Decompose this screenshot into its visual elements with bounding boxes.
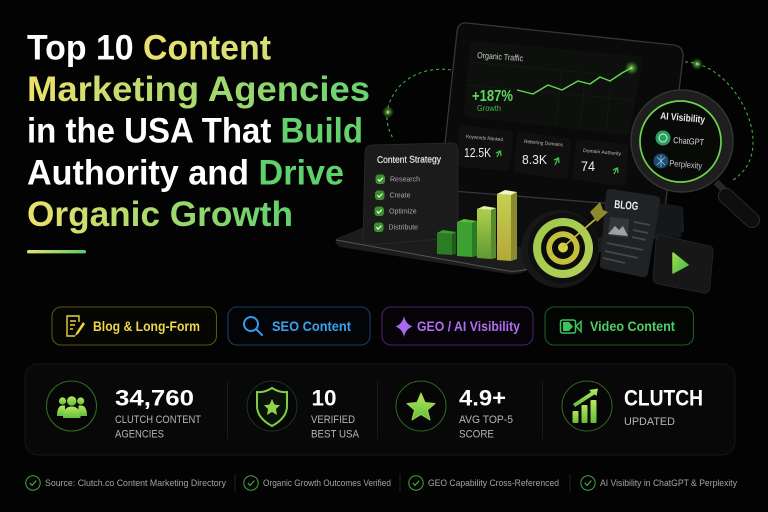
- checklist: Research: [390, 176, 420, 184]
- stat: verified: 10: [312, 386, 336, 411]
- icon: video camera: [560, 320, 581, 333]
- chip: seo content: [228, 307, 370, 345]
- chart gridlines: [466, 62, 636, 130]
- traffic endpoint glow: [624, 61, 638, 75]
- organic traffic panel: [464, 41, 642, 135]
- note: geo capability: [409, 476, 559, 490]
- magnifier handle: [716, 182, 726, 192]
- footer: verification notes: [26, 474, 737, 492]
- icon: people: [57, 396, 87, 418]
- checklist: [374, 174, 420, 232]
- checklist: Optimize: [389, 208, 417, 216]
- panel: content strategy: [363, 143, 458, 245]
- chip: geo and ai visibility: [382, 307, 533, 345]
- blog text lines: [603, 222, 650, 263]
- title underline: [27, 250, 86, 253]
- note: organic growth: [244, 476, 391, 490]
- blog label: BLOG: [614, 199, 639, 213]
- keyboard area: [440, 191, 640, 250]
- title: Marketing Agencies: [27, 70, 370, 109]
- stat: score: 4.9+: [459, 386, 506, 411]
- icon: video play tile: [653, 235, 713, 293]
- card: referring domains: [514, 132, 571, 179]
- laptop screen: [440, 23, 683, 208]
- stat: score: SCORE: [459, 428, 494, 440]
- stat: clutch updated: UPDATED: [624, 416, 675, 428]
- title: Authority and Drive: [27, 153, 344, 192]
- illustration: laptop: [336, 23, 684, 274]
- icon: shield star: [257, 388, 287, 426]
- title: [27, 28, 370, 234]
- title: Organic Growth: [27, 195, 293, 234]
- icon: target with dart: [521, 202, 608, 288]
- stat: clutch updated: CLUTCH: [624, 386, 703, 411]
- chip: video content: [545, 307, 694, 345]
- illustration: blog card: [600, 189, 660, 277]
- panel: statistics: [25, 364, 735, 455]
- traffic line: [517, 68, 631, 94]
- checklist: Create: [390, 192, 411, 200]
- chatgpt row: ChatGPT: [673, 135, 705, 147]
- stat: score: [396, 381, 513, 440]
- bar chart: 3D growth bars: [437, 190, 517, 261]
- chip: geo and ai visibility: GEO / AI Visibility: [417, 319, 520, 334]
- note: geo capability: GEO Capability Cross-Referenced: [428, 478, 559, 489]
- card: domain authority: 74: [581, 159, 595, 174]
- stat: verified: [247, 381, 360, 440]
- note: source: Source: Clutch.co Content Marketing Directory: [45, 478, 226, 489]
- stat: agencies: CLUTCH CONTENT: [115, 414, 201, 426]
- note: source: [26, 476, 226, 490]
- perplexity row: Perplexity: [669, 158, 703, 171]
- card: keywords ranked: Keywords Ranked: [466, 134, 503, 143]
- card: referring domains: Referring Domains: [524, 139, 564, 148]
- note: organic growth: Organic Growth Outcomes Verified: [263, 478, 391, 489]
- stat: verified: VERIFIED: [311, 414, 355, 426]
- category chips: [52, 307, 694, 345]
- lens heading: AI Visibility: [660, 111, 706, 126]
- icon: rising bars: [572, 388, 598, 423]
- title: in the USA That Build: [27, 112, 363, 151]
- card: domain authority: Domain Authority: [583, 148, 622, 157]
- note: ai visibility: AI Visibility in ChatGPT & Perplexity: [600, 478, 737, 489]
- title: Top 10 Content: [27, 28, 271, 67]
- icon: document pencil: [67, 316, 85, 336]
- magnifier lens: [631, 90, 733, 192]
- icon: star: [407, 393, 435, 420]
- icon: magnifying glass with AI visibility: [631, 90, 752, 220]
- laptop base: [336, 190, 684, 274]
- arrow: dashed orbit left: [382, 69, 451, 140]
- card: keywords ranked: [458, 125, 513, 171]
- laptop front rim: [336, 240, 530, 271]
- icon: sparkle: [396, 316, 412, 337]
- blog image: [608, 217, 629, 238]
- stat: clutch updated: [562, 381, 703, 431]
- chip: video content: Video Content: [590, 319, 675, 334]
- card: domain authority: [573, 139, 628, 186]
- illustration: back tile behind blog: [650, 203, 683, 238]
- stat: agencies: AGENCIES: [115, 428, 164, 440]
- stat: verified: BEST USA: [311, 428, 360, 440]
- organic traffic heading: Organic Traffic: [477, 50, 524, 63]
- chip: blog and long-form: Blog & Long-Form: [93, 319, 200, 334]
- card: referring domains: 8.3K: [522, 152, 547, 167]
- arrow: dashed orbit right: [685, 58, 753, 180]
- chip: seo content: SEO Content: [272, 319, 351, 334]
- card: keywords ranked: 12.5K: [464, 145, 491, 160]
- stat: agencies: [46, 381, 201, 440]
- icon: search: [244, 317, 262, 335]
- checklist: Distribute: [388, 224, 418, 232]
- heading: content strategy: Content Strategy: [377, 154, 441, 166]
- growth figure: +187%: [472, 88, 513, 105]
- stat: agencies: 34,760: [115, 386, 194, 411]
- chip: blog and long-form: [52, 307, 216, 345]
- stat: score: AVG TOP-5: [459, 414, 513, 426]
- note: ai visibility: [581, 476, 737, 490]
- growth label: Growth: [477, 103, 501, 113]
